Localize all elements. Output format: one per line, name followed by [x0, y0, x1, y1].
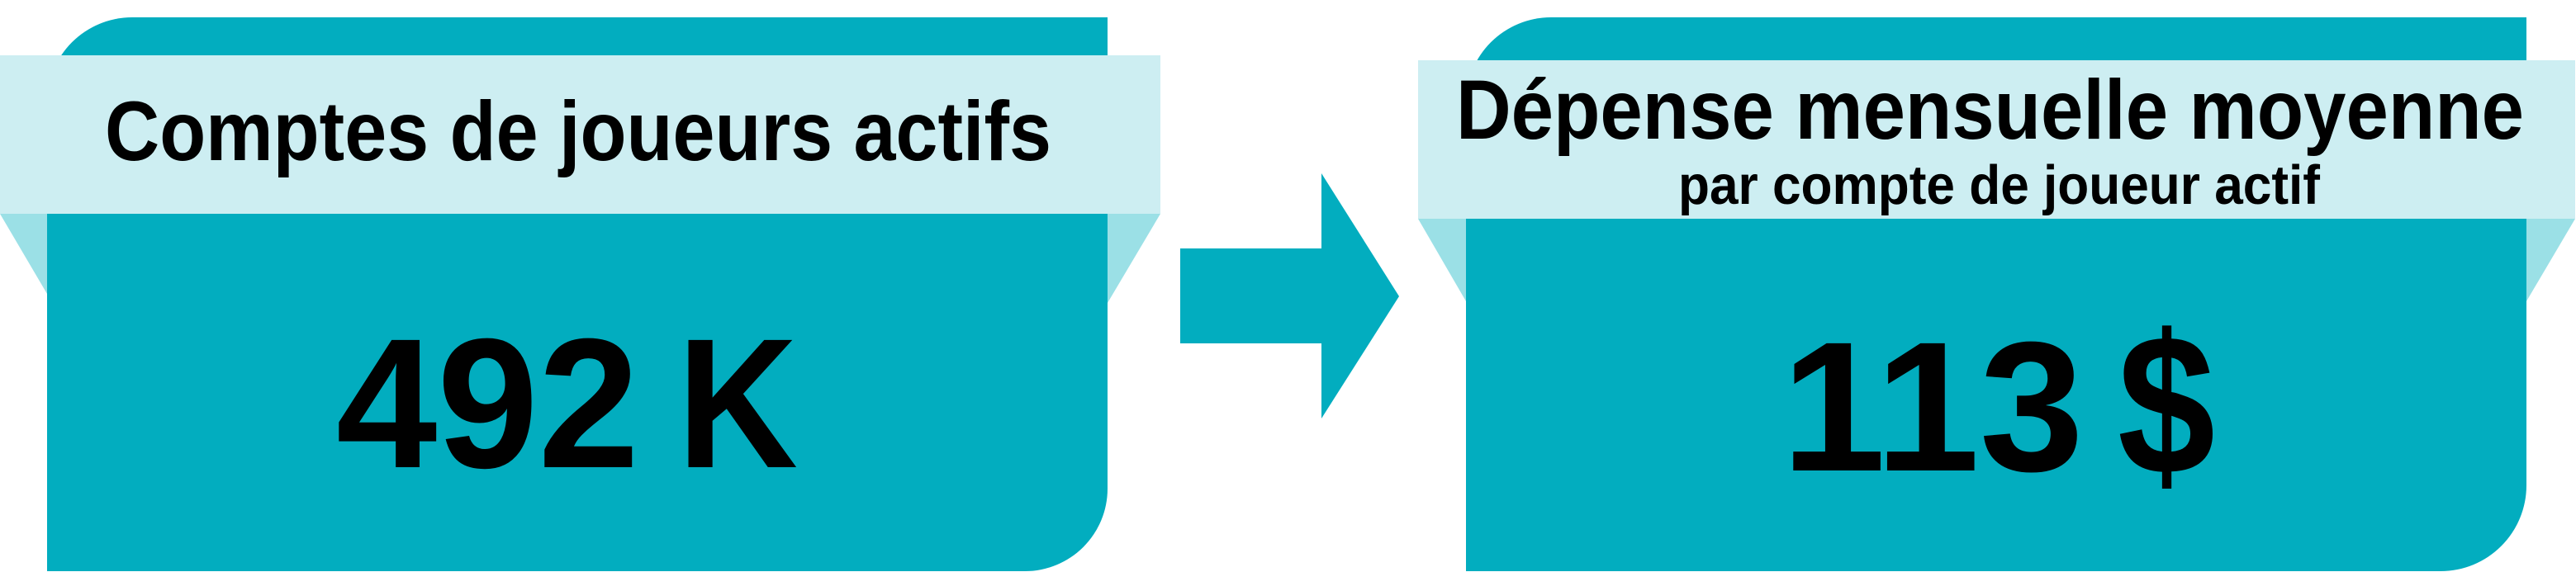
subheading: par compte de joueur actif: [1678, 154, 2321, 216]
unit K: K: [677, 300, 798, 507]
heading: Comptes de joueurs actifs: [105, 84, 1051, 178]
fold: left ribbon: [0, 214, 47, 294]
number 113: 113: [1781, 304, 2084, 510]
banner: [0, 55, 1160, 214]
fold: right ribbon: [1108, 214, 1160, 303]
value: 113 $: [1781, 294, 2215, 517]
fold: right ribbon: [2526, 219, 2575, 301]
unit $: $: [2118, 294, 2215, 517]
value: 492 K: [336, 300, 798, 507]
panel: comptes de joueurs actifs: [0, 17, 1160, 571]
card body: [47, 17, 1108, 571]
card body: [1466, 17, 2526, 571]
banner: [1418, 60, 2575, 219]
fold: left ribbon: [1418, 219, 1466, 301]
number 492: 492: [336, 300, 639, 507]
arrow: [1180, 173, 1399, 418]
panel: dépense mensuelle moyenne: [1418, 17, 2575, 571]
